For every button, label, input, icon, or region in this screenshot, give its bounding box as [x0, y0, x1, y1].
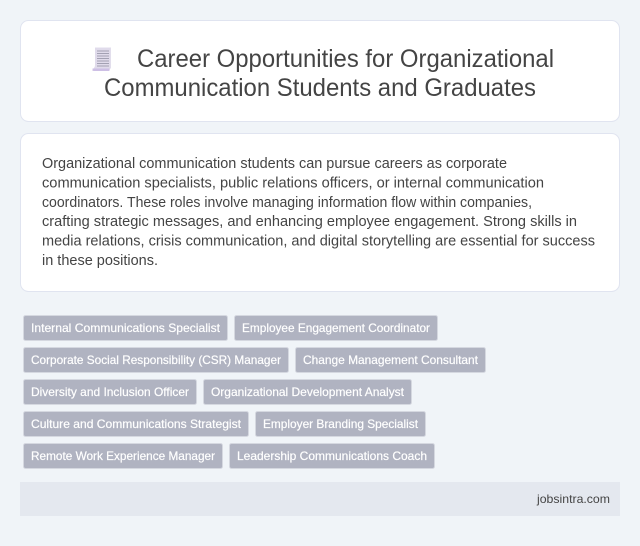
footer bar: [20, 482, 620, 516]
tag: Organizational Development Analyst: Organizational Development Analyst: [211, 385, 405, 399]
tag: Culture and Communications Strategist: Culture and Communications Strategist: [31, 417, 242, 431]
title text: Communication Students and Graduates: [104, 74, 536, 102]
tag: Change Management Consultant: [296, 348, 486, 372]
description text: [42, 156, 595, 269]
description text: crafting strategic messages, and enhancing employee engagement. Strong skills in: [42, 214, 577, 230]
tag: Organizational Development Analyst: [204, 380, 412, 404]
tag: CSR Manager: Corporate Social Responsibility (CSR) Manager: [31, 353, 281, 367]
tag: Change Management Consultant: Change Management Consultant: [303, 353, 479, 367]
description text: in these positions.: [42, 253, 158, 269]
description text: media relations, crisis communication, and digital storytelling are essential for success: [42, 234, 595, 250]
description text: coordinators. These roles involve managing information flow within companies,: [42, 195, 532, 211]
tag: Diversity and Inclusion Officer: [24, 380, 196, 404]
tag: Remote Work Experience Manager: [24, 444, 222, 468]
tag: Employee Engagement Coordinator: Employee Engagement Coordinator: [242, 321, 430, 335]
description panel: [20, 134, 620, 292]
tag: Employer Branding Specialist: Employer Branding Specialist: [263, 417, 419, 431]
description text: Organizational communication students can pursue careers as corporate: [42, 156, 507, 172]
description text: communication specialists, public relations officers, or internal communication: [42, 175, 544, 191]
tag: Leadership Communications Coach: [230, 444, 434, 468]
tag: Leadership Communications Coach: Leadership Communications Coach: [237, 449, 427, 463]
career tags: [24, 316, 486, 468]
tag: Internal Communications Specialist: [24, 316, 228, 340]
title text: [104, 45, 554, 102]
tag: Diversity and Inclusion Officer: Diversity and Inclusion Officer: [31, 385, 189, 399]
tag: CSR Manager: [24, 348, 288, 372]
footer source text: jobsintra.com: [536, 492, 610, 506]
title panel: [20, 20, 620, 122]
tag: Remote Work Experience Manager: Remote Work Experience Manager: [31, 449, 215, 463]
title text: Career Opportunities for Organizational: [137, 45, 554, 73]
tag: Internal Communications Specialist: Internal Communications Specialist: [31, 321, 221, 335]
tag: Employee Engagement Coordinator: [234, 316, 438, 340]
tag: Culture and Communications Strategist: [24, 412, 248, 436]
tag: Employer Branding Specialist: [256, 412, 426, 436]
icon: document scroll: [92, 48, 111, 71]
